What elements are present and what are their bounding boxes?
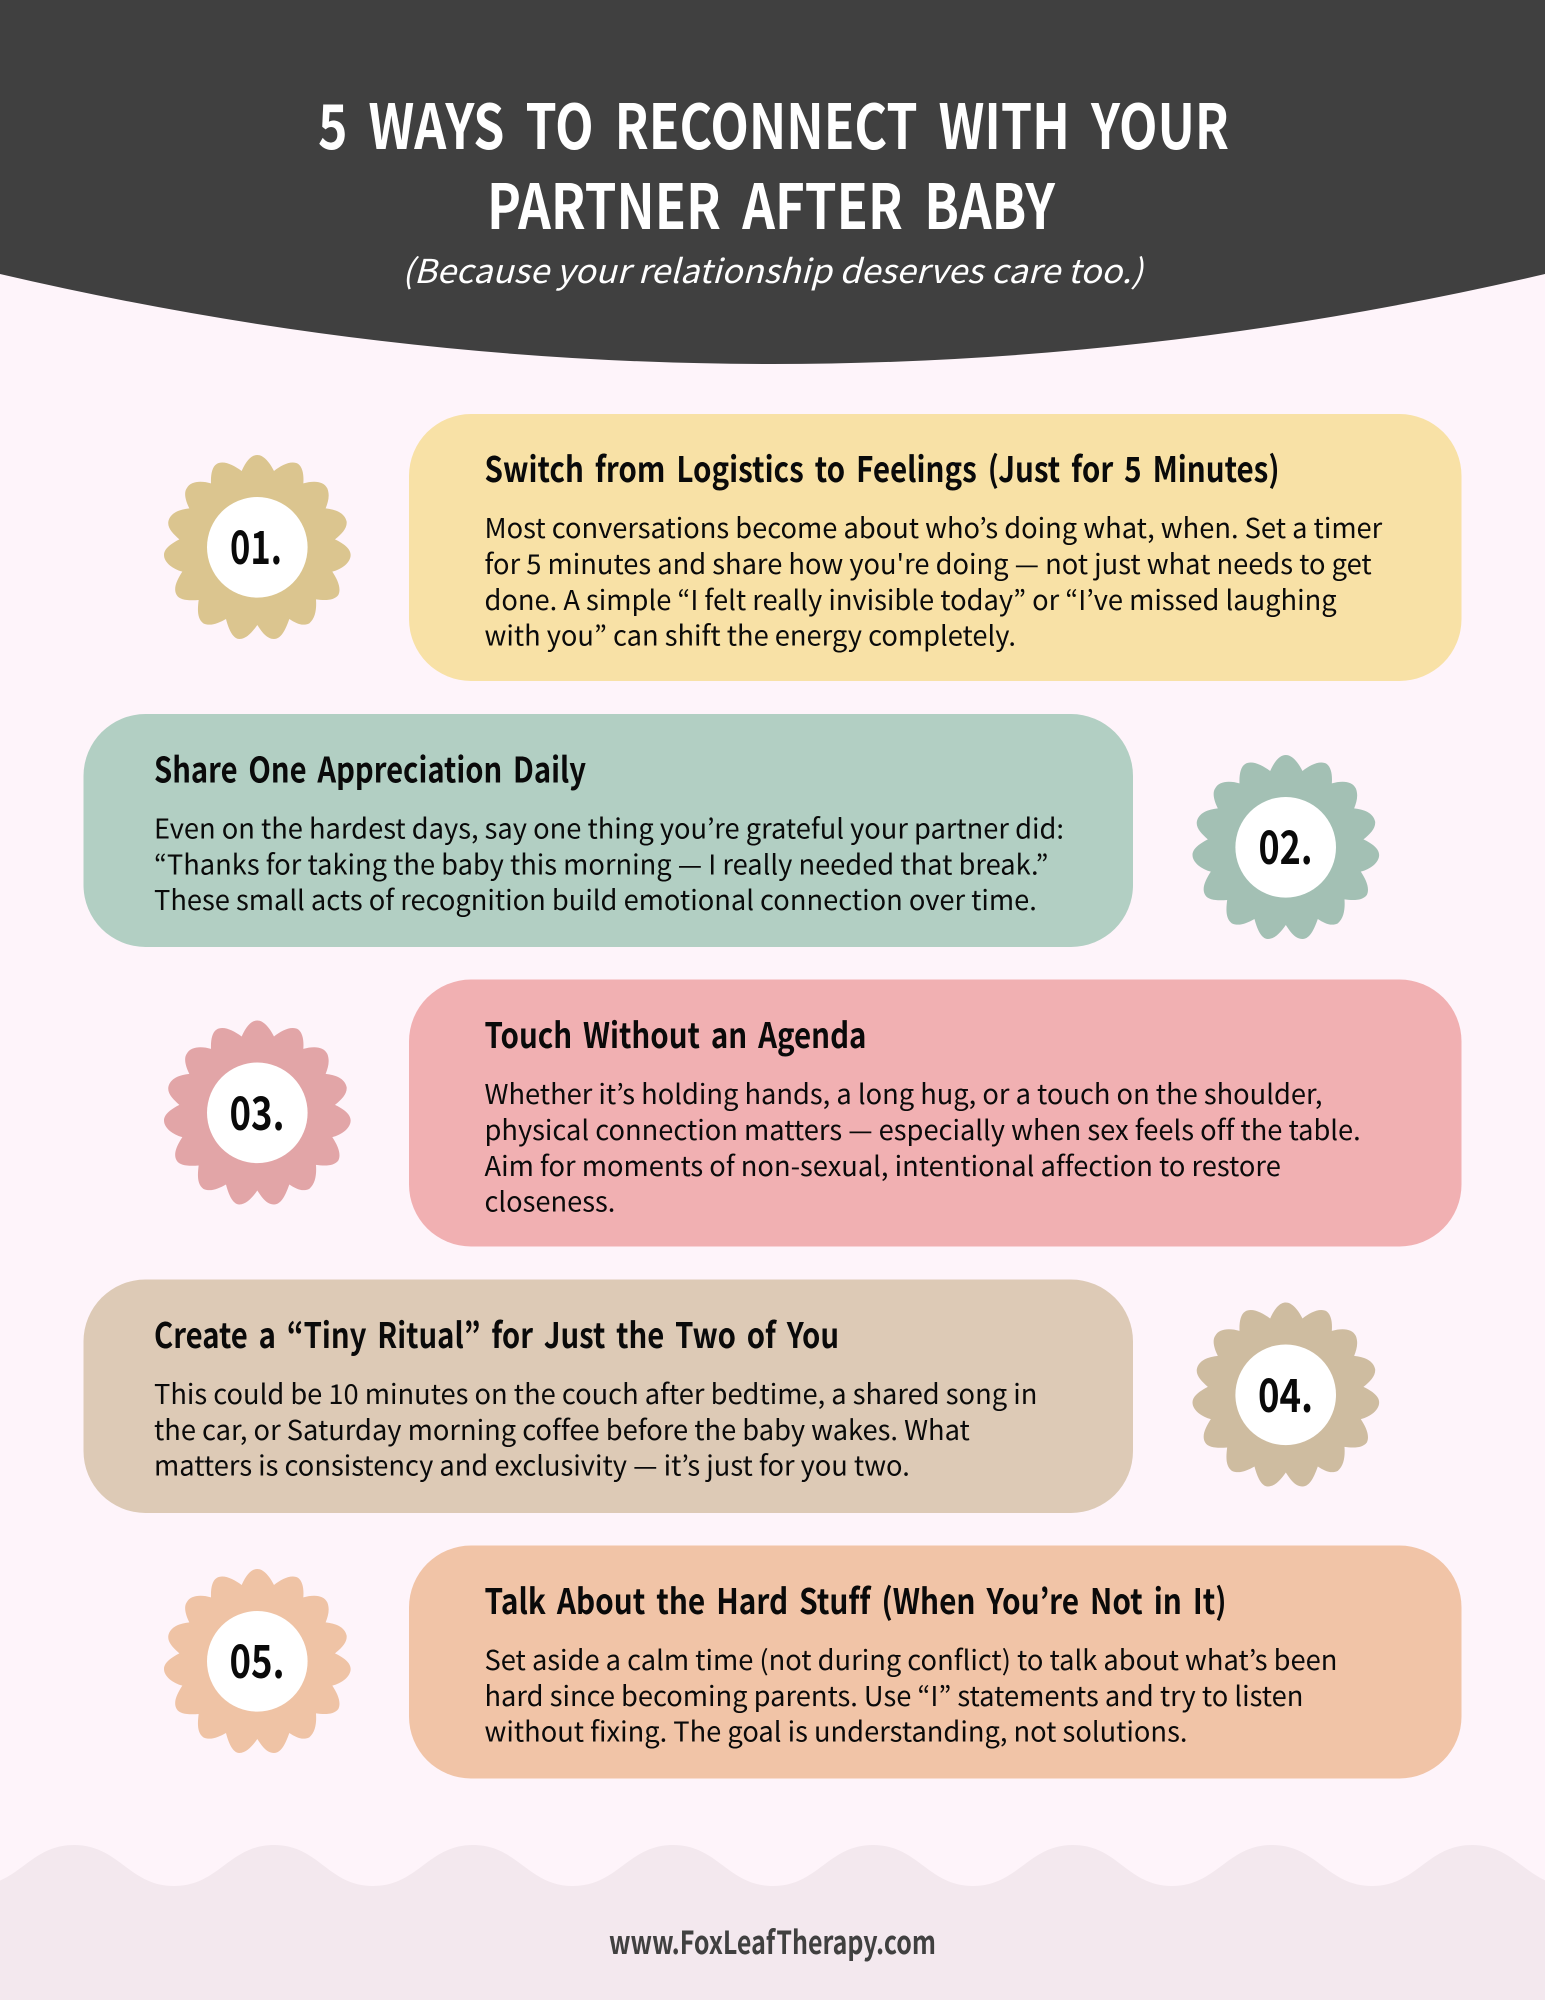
- body text: tip 01: for 5 minutes and share how you're doing — not just what needs to get: [484, 542, 1372, 582]
- icon: flower badge 02: 02.: [1258, 812, 1312, 878]
- body text: tip 05: Set aside a calm time (not during conflict) to talk about what’s been: [484, 1638, 1337, 1678]
- icon: flower badge 03: 03.: [230, 1078, 284, 1144]
- heading: tip 04: Create a “Tiny Ritual” for Just the Two of You: [154, 1308, 839, 1359]
- body text: tip 01: [484, 506, 1383, 654]
- heading: tip 02: Share One Appreciation Daily: [154, 742, 586, 794]
- heading: tip 05: Talk About the Hard Stuff (When You’re Not in It): [484, 1574, 1226, 1625]
- icon: flower badge 01: [164, 455, 351, 639]
- body text: tip 03: Aim for moments of non-sexual, intentional affection to restore: [484, 1144, 1281, 1184]
- body text: tip 03: [484, 1072, 1361, 1220]
- card: tip 02: [84, 714, 1133, 947]
- body text: tip 02: “Thanks for taking the baby this morning — I really needed that break.”: [154, 842, 1048, 882]
- icon: flower badge 01: 01.: [230, 512, 282, 578]
- body text: tip 02: These small acts of recognition build emotional connection over time.: [154, 878, 1037, 918]
- card: tip 03: [409, 980, 1462, 1246]
- website url: www.FoxLeafTherapy.com: [609, 1918, 936, 1964]
- card: tip 05: [409, 1546, 1462, 1778]
- body text: tip 04: the car, or Saturday morning coffee before the baby wakes. What: [154, 1408, 970, 1448]
- heading: tip 03: Touch Without an Agenda: [484, 1008, 866, 1059]
- body text: tip 02: Even on the hardest days, say one thing you’re grateful your partner did:: [154, 806, 1064, 846]
- body text: tip 05: without fixing. The goal is understanding, not solutions.: [484, 1710, 1187, 1750]
- body text: tip 02: [154, 806, 1064, 918]
- icon: flower badge 05: [164, 1569, 351, 1753]
- panel: tip 01: [164, 414, 1462, 681]
- header banner: [0, 0, 1545, 364]
- panel: tip 04: [84, 1280, 1379, 1513]
- body text: tip 01: with you” can shift the energy completely.: [484, 614, 1016, 654]
- body text: tip 05: hard since becoming parents. Use “I” statements and try to listen: [484, 1674, 1303, 1714]
- panel: tip 03: [164, 980, 1462, 1246]
- subtitle: (Because your relationship deserves care too.): [402, 245, 1145, 293]
- body text: tip 03: closeness.: [484, 1180, 615, 1220]
- icon: flower badge 04: [1192, 1302, 1379, 1486]
- icon: flower badge 03: [164, 1020, 351, 1204]
- card: tip 01: [409, 414, 1462, 681]
- body text: tip 05: [484, 1638, 1337, 1750]
- card: tip 04: [84, 1280, 1133, 1513]
- title: PARTNER AFTER BABY: [487, 157, 1056, 247]
- curved dark header shape: [0, 0, 1545, 364]
- title: 5 WAYS TO RECONNECT WITH YOUR: [318, 77, 1229, 167]
- body text: tip 04: [154, 1372, 1037, 1484]
- icon: flower badge 05: 05.: [230, 1626, 284, 1692]
- body text: tip 01: Most conversations become about who’s doing what, when. Set a timer: [484, 506, 1383, 546]
- panel: tip 05: [164, 1546, 1462, 1778]
- icon: flower badge 04: 04.: [1258, 1360, 1313, 1426]
- body text: tip 01: done. A simple “I felt really invisible today” or “I’ve missed laughing: [484, 578, 1337, 618]
- body text: tip 04: This could be 10 minutes on the couch after bedtime, a shared song in: [154, 1372, 1037, 1412]
- wavy footer shape: [0, 1845, 1545, 2000]
- title: [318, 77, 1229, 247]
- body text: tip 04: matters is consistency and exclusivity — it’s just for you two.: [154, 1444, 910, 1484]
- body text: tip 03: Whether it’s holding hands, a long hug, or a touch on the shoulder,: [484, 1072, 1322, 1112]
- footer band: [0, 1845, 1545, 2000]
- icon: flower badge 02: [1192, 755, 1379, 939]
- panel: tip 02: [84, 714, 1379, 947]
- heading: tip 01: Switch from Logistics to Feelings (Just for 5 Minutes): [484, 442, 1280, 493]
- body text: tip 03: physical connection matters — especially when sex feels off the table.: [484, 1108, 1361, 1148]
